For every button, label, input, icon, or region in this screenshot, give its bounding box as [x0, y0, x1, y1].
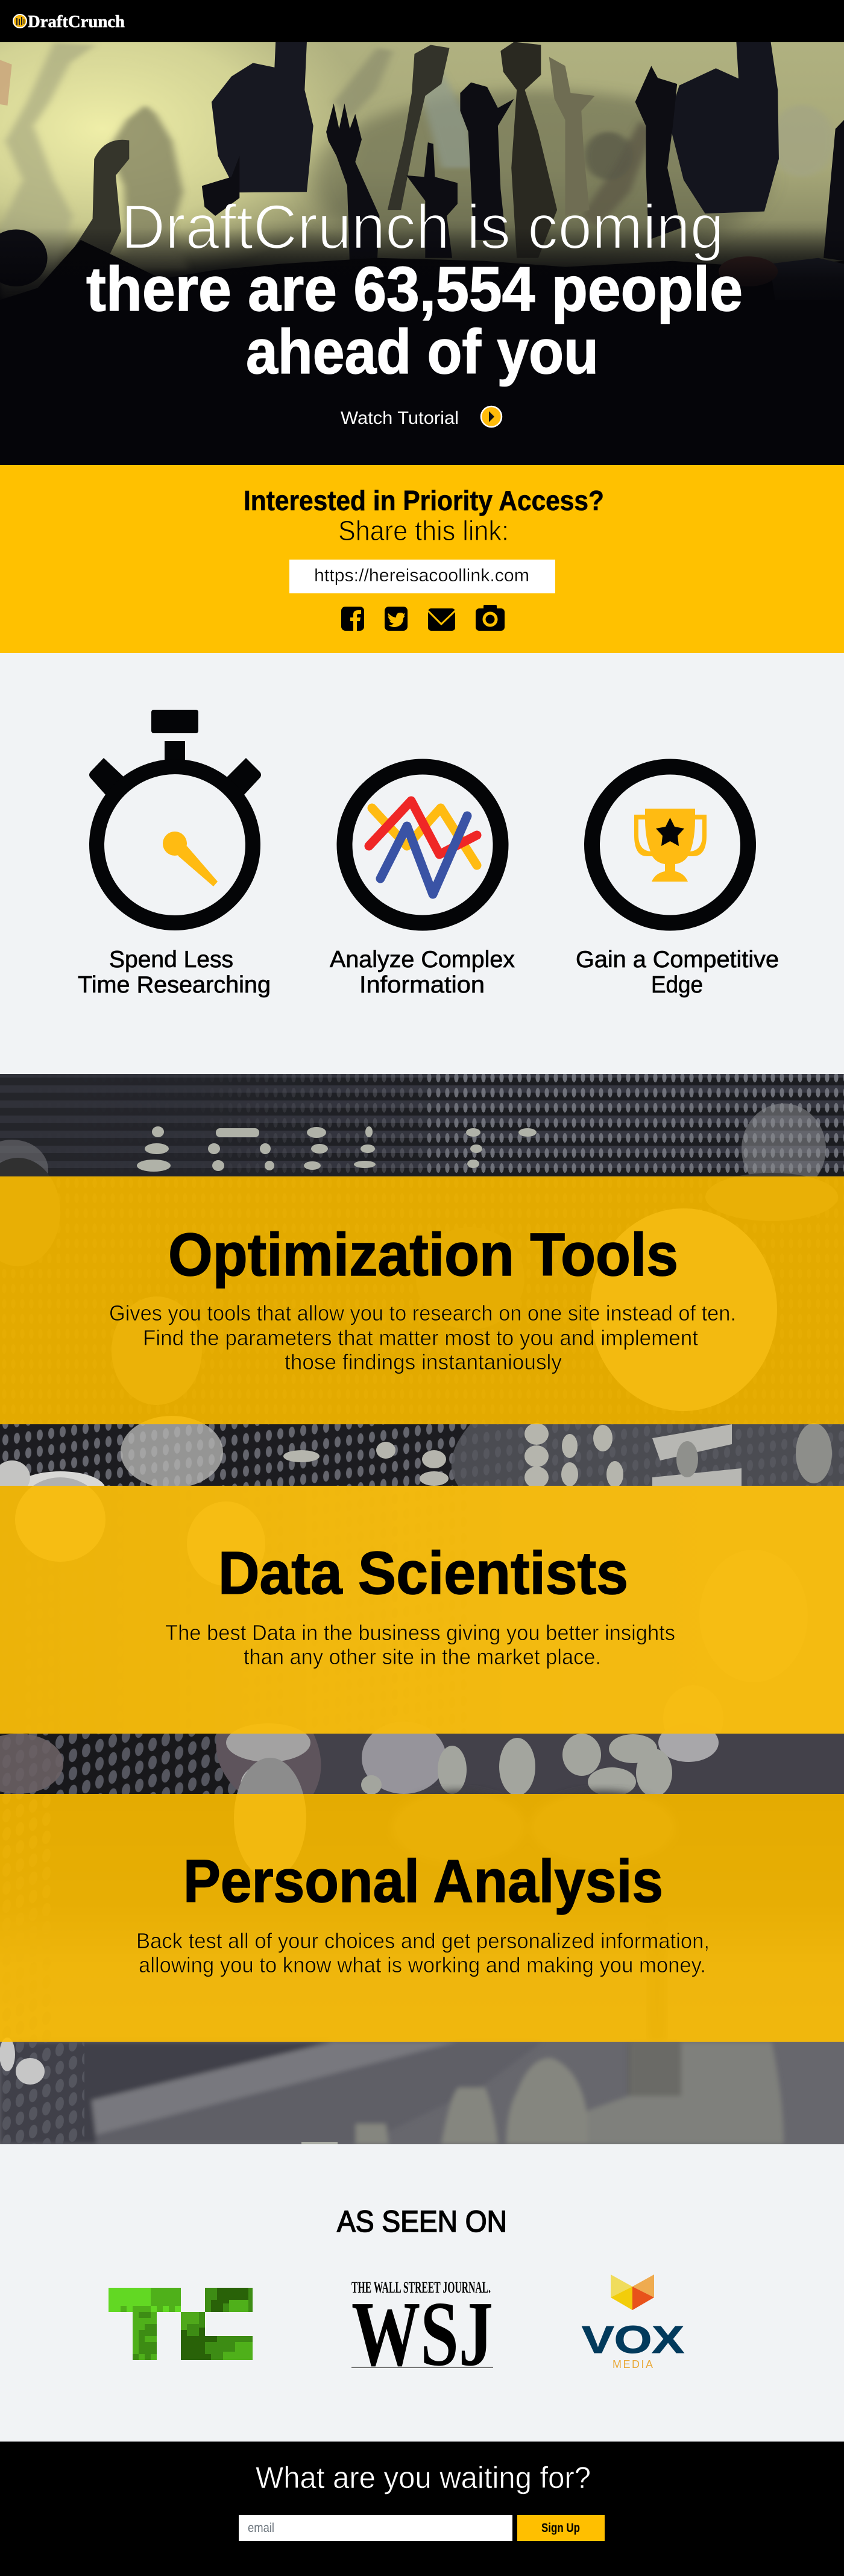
- caption: competitive edge: Gain a Competitive: [576, 947, 779, 973]
- description: allowing you to know what is working and making you money.: [139, 1953, 706, 1977]
- logo: vox media: [582, 2275, 684, 2370]
- watch tutorial link: Watch Tutorial: [341, 408, 459, 428]
- caption: competitive edge: Edge: [651, 972, 703, 998]
- caption: analyze complex: Information: [359, 972, 485, 998]
- caption: spend less: Time Researching: [78, 972, 271, 998]
- third band: [0, 1734, 844, 1794]
- icon: twitter: [385, 607, 408, 631]
- area under second yellow panel: [0, 1486, 844, 1734]
- icon: trophy: [592, 767, 748, 923]
- panel: benefits: [0, 653, 844, 1074]
- description: Find the parameters that matter most to you and implement: [143, 1325, 698, 1350]
- description: [109, 1301, 736, 1374]
- description: The best Data in the business giving you better insights: [165, 1620, 675, 1645]
- headline: ahead of you: [246, 317, 599, 387]
- panel: data scientists: [0, 1486, 844, 1734]
- description: [165, 1620, 675, 1669]
- panel: personal analysis: [0, 1794, 844, 2042]
- hero photo: crowd silhouettes: [0, 42, 844, 465]
- logo: DraftCrunch: [28, 13, 125, 31]
- top band: [0, 1074, 844, 1176]
- icon: play button: [481, 406, 502, 427]
- description: Gives you tools that allow you to research on one site instead of ten.: [109, 1301, 736, 1325]
- icon: stopwatch: [89, 710, 261, 923]
- sign up button: Sign Up: [541, 2521, 580, 2535]
- icon: envelope: [428, 608, 455, 631]
- logo: wall street journal: THE WALL STREET JOURNAL.: [351, 2279, 491, 2296]
- icon: facebook: [341, 607, 364, 631]
- background photo: bokeh data board: [0, 1074, 844, 2150]
- area under third yellow panel: [0, 1794, 844, 2042]
- logo: vox media: MEDIA: [613, 2358, 653, 2370]
- link field: [289, 560, 555, 593]
- logo: techcrunch: [109, 2288, 253, 2360]
- icon: analysis chart: [345, 767, 500, 923]
- heading: Personal Analysis: [183, 1848, 663, 1915]
- area under first yellow panel: [0, 1176, 844, 1424]
- heading: What are you waiting for?: [256, 2461, 591, 2495]
- header bar: [0, 0, 844, 42]
- panel: signup footer: [0, 2442, 844, 2576]
- bottom band: [0, 2042, 844, 2144]
- panel: optimization tools: [0, 1176, 844, 1424]
- description: than any other site in the market place.: [244, 1644, 601, 1669]
- description: those findings instantaniously: [285, 1350, 562, 1374]
- link field: https://hereisacoollink.com: [314, 566, 529, 586]
- left foam finger: [212, 42, 313, 192]
- panel: as seen on: [0, 2144, 844, 2442]
- icon: camera: [476, 605, 505, 631]
- heading: Interested in Priority Access?: [244, 485, 604, 516]
- watch tutorial link: [341, 406, 502, 428]
- description: [136, 1928, 710, 1977]
- caption: competitive edge: [576, 947, 779, 998]
- raised dark arms: [326, 103, 379, 270]
- right foam finger: [669, 42, 779, 213]
- headline: DraftCrunch is coming: [121, 192, 724, 262]
- caption: analyze complex: [330, 947, 515, 998]
- heading: AS SEEN ON: [337, 2205, 507, 2238]
- description: Back test all of your choices and get personalized information,: [136, 1928, 710, 1953]
- second band: [0, 1424, 844, 1486]
- caption: spend less: Spend Less: [109, 947, 233, 973]
- headline: [86, 192, 743, 387]
- heading: Optimization Tools: [168, 1221, 678, 1289]
- sign up button: [517, 2515, 605, 2541]
- email input: [239, 2515, 512, 2541]
- subheading: Share this link:: [338, 515, 509, 546]
- panel: priority access: [0, 465, 844, 653]
- hero panel: [0, 0, 844, 465]
- caption: spend less: [78, 947, 271, 998]
- email input: email: [248, 2521, 274, 2535]
- logo: vox media: VOX: [582, 2318, 684, 2361]
- logo: wall street journal: WSJ: [351, 2283, 493, 2385]
- caption: analyze complex: Analyze Complex: [330, 947, 515, 973]
- headline: there are 63,554 people: [86, 254, 743, 324]
- heading: Data Scientists: [218, 1539, 628, 1607]
